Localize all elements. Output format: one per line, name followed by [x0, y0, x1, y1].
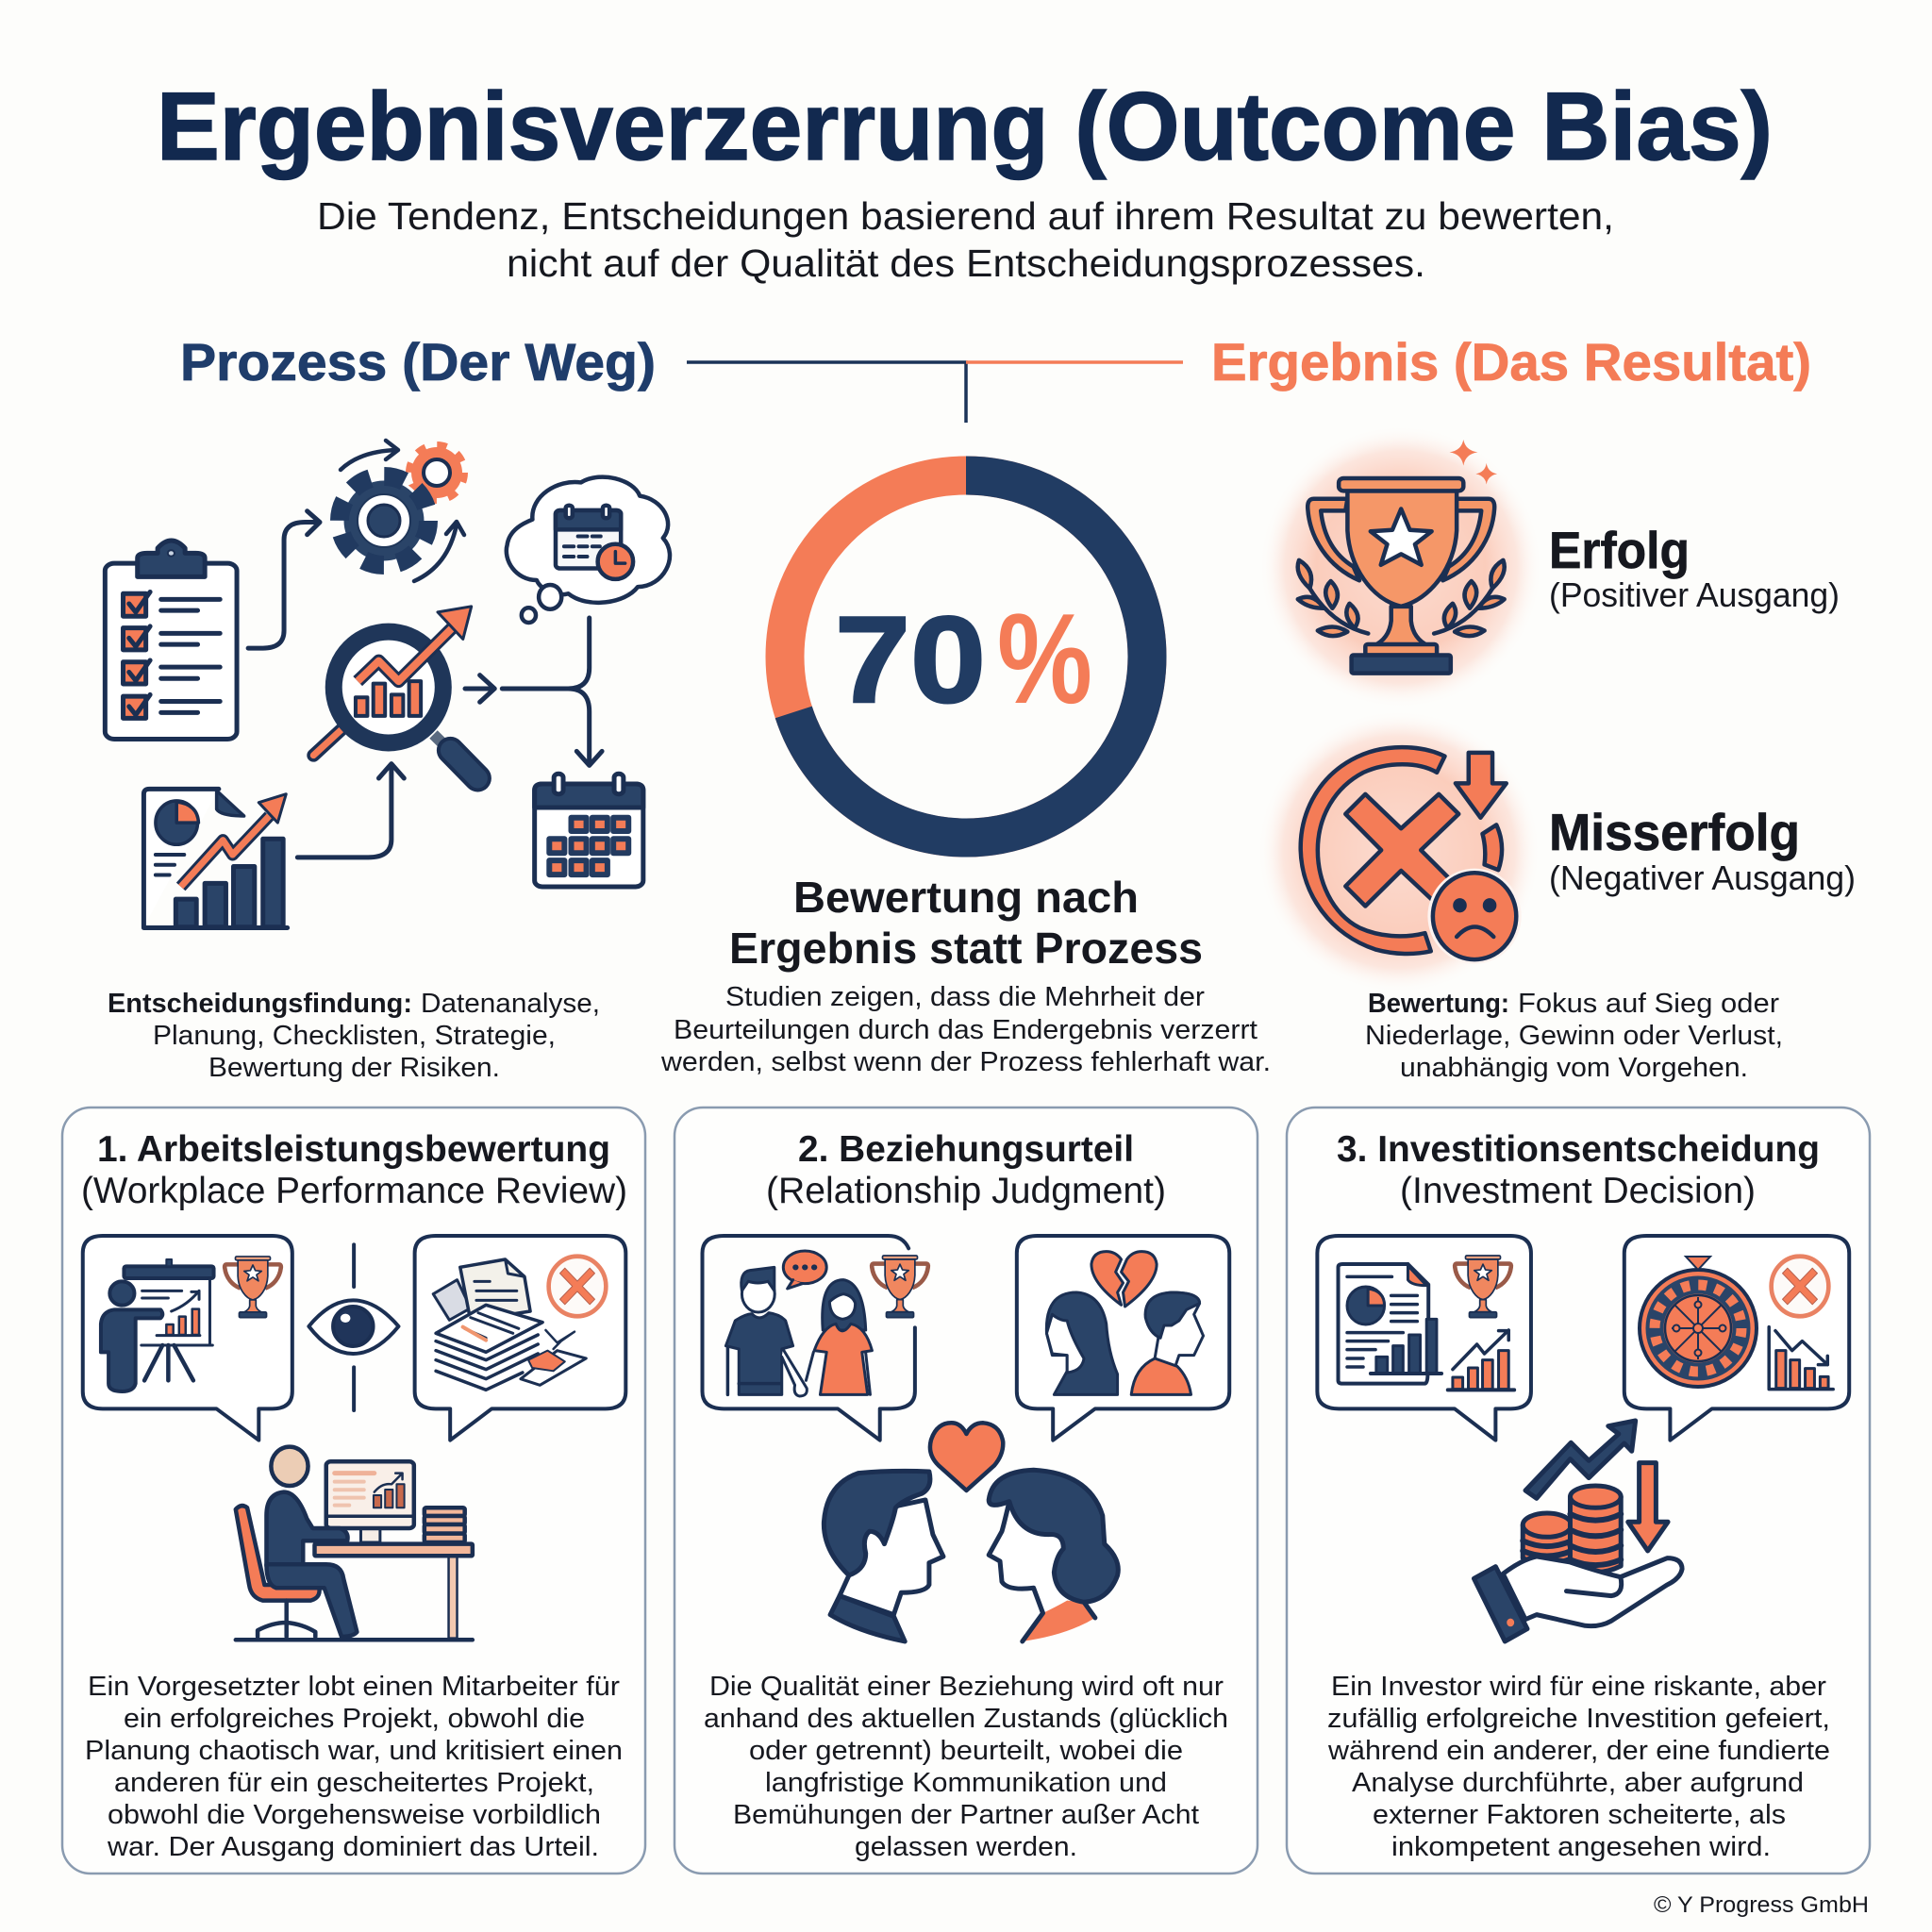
speech bubble: roulette loss [1624, 1236, 1849, 1441]
card 2 text: gelassen werden. [855, 1832, 1077, 1862]
panel: card 3 investment [1287, 1108, 1870, 1874]
arrow: magnifier to calendar [465, 618, 602, 765]
icon: man profile [824, 1471, 943, 1641]
heading: Prozess: Prozess (Der Weg) [180, 332, 656, 391]
connector lines [687, 362, 1183, 423]
right text: Bewertung: [1368, 989, 1509, 1019]
card 1 heading [81, 1129, 627, 1211]
panel: card 1 workplace [62, 1108, 645, 1874]
icon: eye [308, 1244, 398, 1410]
label: Misserfolg [1549, 803, 1856, 897]
right text: Fokus auf Sieg oder [1518, 989, 1779, 1019]
icon: calendar [535, 774, 643, 887]
center text: Beurteilungen durch das Endergebnis verzerrt [674, 1015, 1257, 1045]
subtitle: nicht auf der Qualität des Entscheidungsprozesses. [507, 242, 1425, 285]
left text: Datenanalyse, [421, 989, 600, 1019]
card 1 text: Planung chaotisch war, und kritisiert einen [85, 1736, 623, 1766]
card 2 heading: (Relationship Judgment) [766, 1171, 1166, 1211]
card 2 heading [766, 1129, 1166, 1211]
card 2 text: oder getrennt) beurteilt, wobei die [749, 1736, 1183, 1766]
icon: heart [930, 1423, 1003, 1491]
center heading: Ergebnis statt Prozess [729, 924, 1203, 973]
speech bubble: broken up couple [1017, 1236, 1229, 1441]
left text: Bewertung der Risiken. [208, 1053, 500, 1083]
speech bubble: happy couple [703, 1236, 915, 1441]
card 1 text [85, 1672, 623, 1862]
card 3 heading [1337, 1129, 1820, 1211]
panel: process icons [105, 441, 670, 928]
card 1 heading: 1. Arbeitsleistungsbewertung [97, 1129, 610, 1170]
icon: trophy [225, 1257, 281, 1318]
copyright: © Y Progress GmbH [1654, 1892, 1869, 1918]
card 3 heading: 3. Investitionsentscheidung [1337, 1129, 1820, 1170]
icon: trophy success [1259, 425, 1542, 708]
card 2 text: Bemühungen der Partner außer Acht [733, 1800, 1199, 1830]
card 3 text: während ein anderer, der eine fundierte [1327, 1736, 1830, 1766]
icon: failure badge [549, 1257, 606, 1316]
left text: Planung, Checklisten, Strategie, [153, 1021, 556, 1051]
icon: failure X [1257, 710, 1541, 993]
panel: card 2 relationship [675, 1108, 1257, 1874]
label: Erfolg: Erfolg [1549, 521, 1690, 579]
right text: Niederlage, Gewinn oder Verlust, [1365, 1021, 1783, 1051]
center heading [729, 873, 1203, 973]
icon: clipboard checklist [105, 541, 237, 740]
subtitle: Die Tendenz, Entscheidungen basierend auf ihrem Resultat zu bewerten, [317, 194, 1614, 238]
speech bubble: failed documents [415, 1236, 625, 1441]
card 1 text: obwohl die Vorgehensweise vorbildlich [108, 1800, 601, 1830]
left text [108, 989, 600, 1083]
center heading: Bewertung nach [793, 873, 1139, 922]
center text: Studien zeigen, dass die Mehrheit der [725, 982, 1205, 1012]
icon: person at desk [236, 1447, 473, 1640]
card 3 text [1327, 1672, 1830, 1862]
icon: woman profile [989, 1470, 1118, 1641]
label: Erfolg: (Positiver Ausgang) [1549, 575, 1840, 614]
donut chart: 70%: % [997, 587, 1092, 730]
card 1 text: ein erfolgreiches Projekt, obwohl die [124, 1704, 585, 1734]
right text: unabhängig vom Vorgehen. [1400, 1053, 1748, 1083]
card 3 text: zufällig erfolgreiche Investition gefeiert, [1327, 1704, 1830, 1734]
icon: trophy [1455, 1256, 1511, 1318]
icon: gears [340, 441, 464, 581]
card 3 text: Ein Investor wird für eine riskante, aber [1331, 1672, 1826, 1702]
left text: Entscheidungsfindung: [108, 989, 412, 1019]
icon: magnifier with growth arrow [313, 607, 477, 778]
card 3 text: externer Faktoren scheiterte, als [1373, 1800, 1786, 1830]
speech bubble: success presentation [83, 1236, 292, 1441]
card 2 heading: 2. Beziehungsurteil [798, 1129, 1134, 1170]
card 3 text: Analyse durchführte, aber aufgrund [1352, 1768, 1804, 1798]
label: Erfolg [1549, 521, 1840, 614]
icon: report with growth chart [143, 789, 288, 928]
right text [1365, 989, 1783, 1083]
card 2 text: langfristige Kommunikation und [765, 1768, 1167, 1798]
card 1 text: anderen für ein gescheitertes Projekt, [114, 1768, 594, 1798]
speech bubble: solid analysis [1317, 1236, 1531, 1441]
donut chart: 70% [785, 475, 1147, 838]
card 1 text: Ein Vorgesetzter lobt einen Mitarbeiter für [88, 1672, 620, 1702]
center text [660, 982, 1271, 1077]
title: Ergebnisverzerrung (Outcome Bias) [157, 73, 1773, 180]
label: Misserfolg: Misserfolg [1549, 803, 1800, 861]
card 2 text [704, 1672, 1228, 1862]
card 3 heading: (Investment Decision) [1400, 1171, 1756, 1211]
icon: hand with coins and arrows [1474, 1421, 1682, 1641]
icon: thought cloud with calendar [507, 477, 670, 623]
donut chart: 70%: 70 [835, 591, 986, 728]
heading: Ergebnis: Ergebnis (Das Resultat) [1211, 332, 1811, 391]
card 3 text: inkompetent angesehen wird. [1391, 1832, 1771, 1862]
card 1 heading: (Workplace Performance Review) [81, 1171, 627, 1211]
center text: werden, selbst wenn der Prozess fehlerhaft war. [660, 1047, 1271, 1077]
arrow: report to magnifier [297, 764, 404, 858]
icon: trophy [872, 1256, 928, 1318]
icon: failure badge [1772, 1257, 1828, 1316]
icon: roulette wheel [1640, 1257, 1757, 1387]
arrow: checklist to gears [248, 511, 320, 648]
card 2 text: anhand des aktuellen Zustands (glücklich [704, 1704, 1228, 1734]
card 2 text: Die Qualität einer Beziehung wird oft nur [709, 1672, 1224, 1702]
label: Misserfolg: (Negativer Ausgang) [1549, 858, 1856, 897]
subtitle [317, 194, 1614, 285]
card 1 text: war. Der Ausgang dominiert das Urteil. [107, 1832, 599, 1862]
